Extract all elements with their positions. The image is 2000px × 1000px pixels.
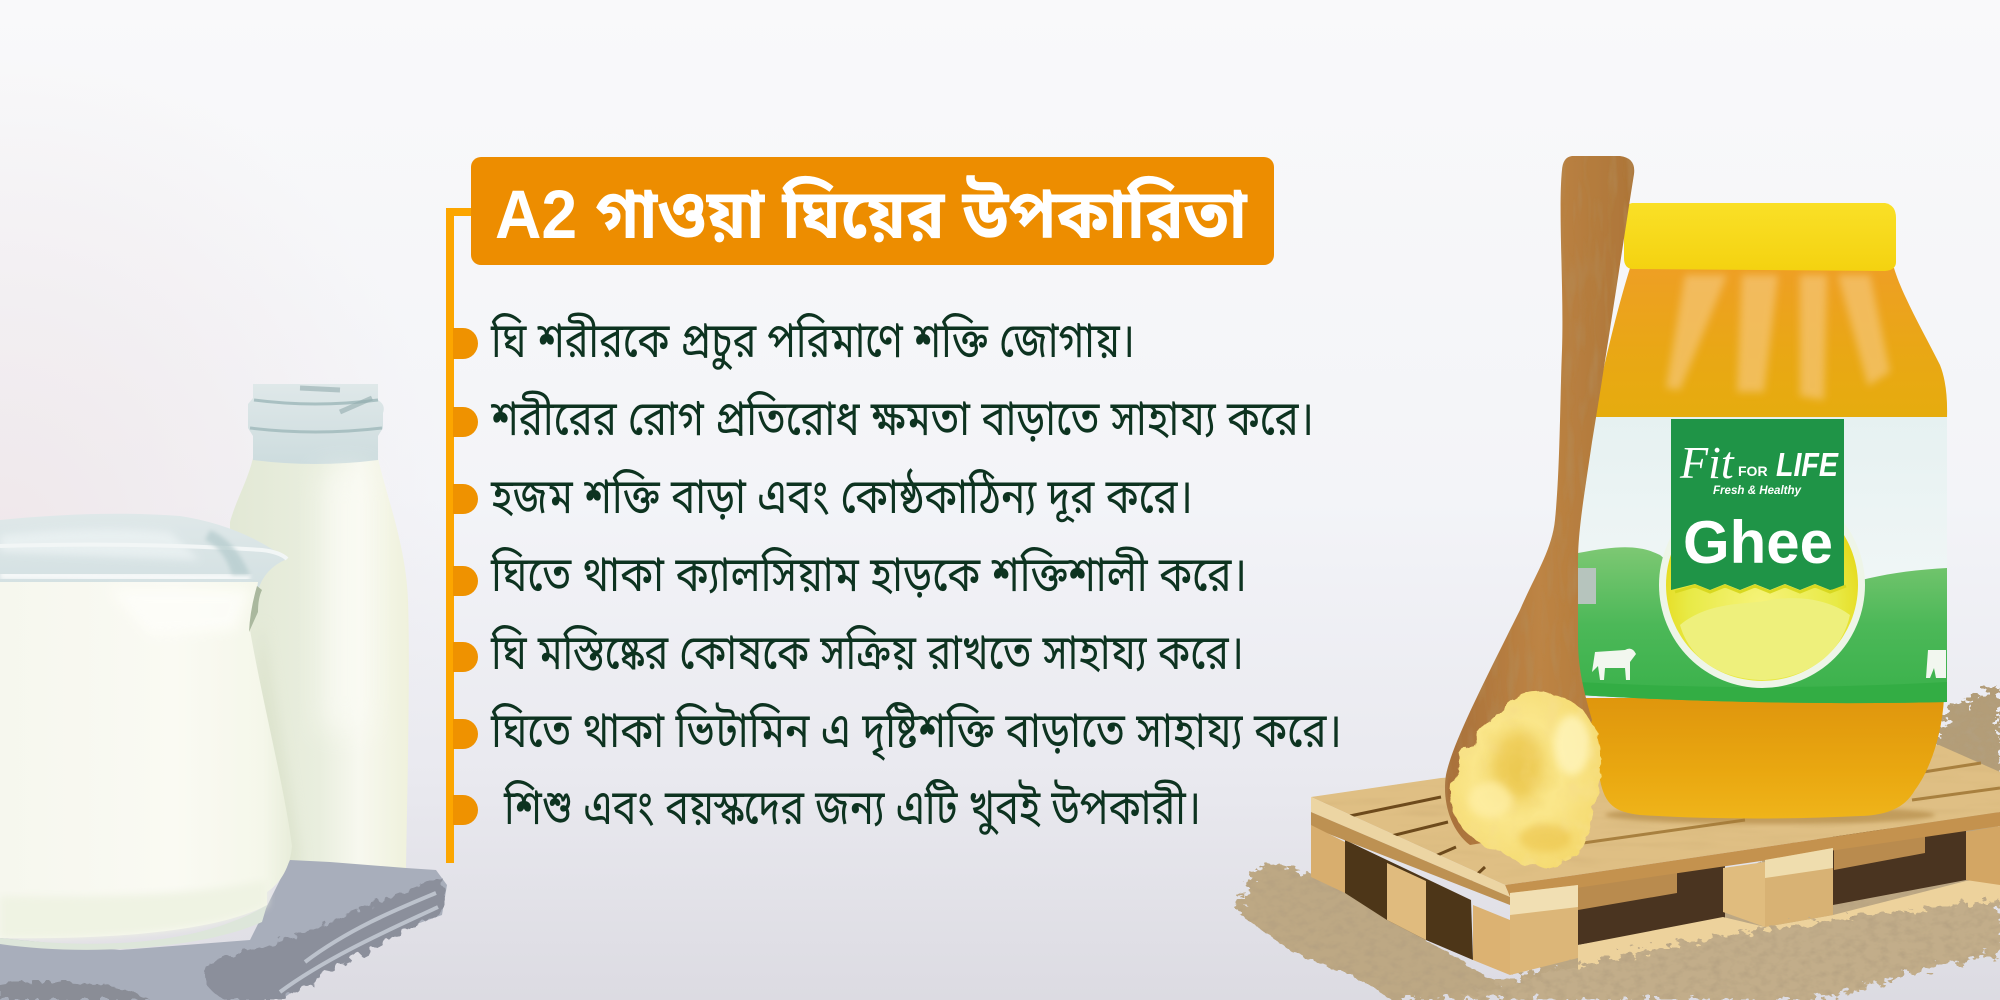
benefit 4: ঘিতে থাকা ক্যালসিয়াম হাড়কে শক্তিশালী করে। [490,546,1247,602]
cows [1592,649,1946,680]
benefit 2: শরীরের রোগ প্রতিরোধ ক্ষমতা বাড়াতে সাহায্য করে। [490,390,1314,446]
title banner [471,157,1274,265]
bowl [1659,482,1865,688]
jar shadow [1605,806,1935,824]
post: second [1387,863,1426,940]
lid [1624,203,1896,271]
label green hills [1578,547,1947,703]
deck edges [1505,812,2000,897]
jar label [1578,417,1947,702]
logo panel: Ghee [1683,509,1833,576]
QR code [1578,568,1596,604]
jar upper body [1590,268,1947,418]
benefit 7: শিশু এবং বয়স্কদের জন্য এটি খুবই উপকারী। [503,779,1201,836]
illustration: wooden pallet [1311,745,2000,975]
benefit 6: ঘিতে থাকা ভিটামিন এ দৃষ্টিশক্তি বাড়াতে সাহায্য করে। [490,702,1342,761]
logo panel [1671,419,1846,592]
post: left [1311,825,1345,893]
title banner: A2 গাওয়া ঘিয়ের উপকারিতা [495,174,1248,253]
logo panel: Fresh & Healthy [1713,483,1802,497]
bottom board [1578,877,2000,975]
post: centre [1723,862,1765,927]
logo panel: FOR [1738,463,1768,479]
illustration: wooden spoon [1445,156,1634,845]
illustration: milk jug [0,514,292,950]
post: right [1966,826,2000,885]
benefit 1: ঘি শরীরকে প্রচুর পরিমাণে শক্তি জোগায়। [490,312,1135,371]
illustration: burlap back [1237,688,2000,1000]
line and title connector [446,208,476,863]
illustration: ghee jar [1578,203,1947,824]
benefit 3: হজম শক্তি বাড়া এবং কোষ্ঠকাঠিন্য দূর করে। [490,467,1193,524]
benefit 5: ঘি মস্তিষ্কের কোষকে সক্রিয় রাখতে সাহায্য করে। [490,623,1244,680]
deck top [1311,745,2000,885]
dark gaps [1345,840,1473,960]
logo panel: Fit [1679,437,1735,488]
illustration: ghee lump [1450,691,1601,866]
jar lower body [1582,698,1944,819]
illustration: milk bottle [230,384,409,868]
illustration: burlap front [1450,900,2000,1000]
post: front corner [1473,905,1510,975]
illustration: grey cloth [0,860,447,1000]
logo panel: LIFE [1776,446,1839,483]
